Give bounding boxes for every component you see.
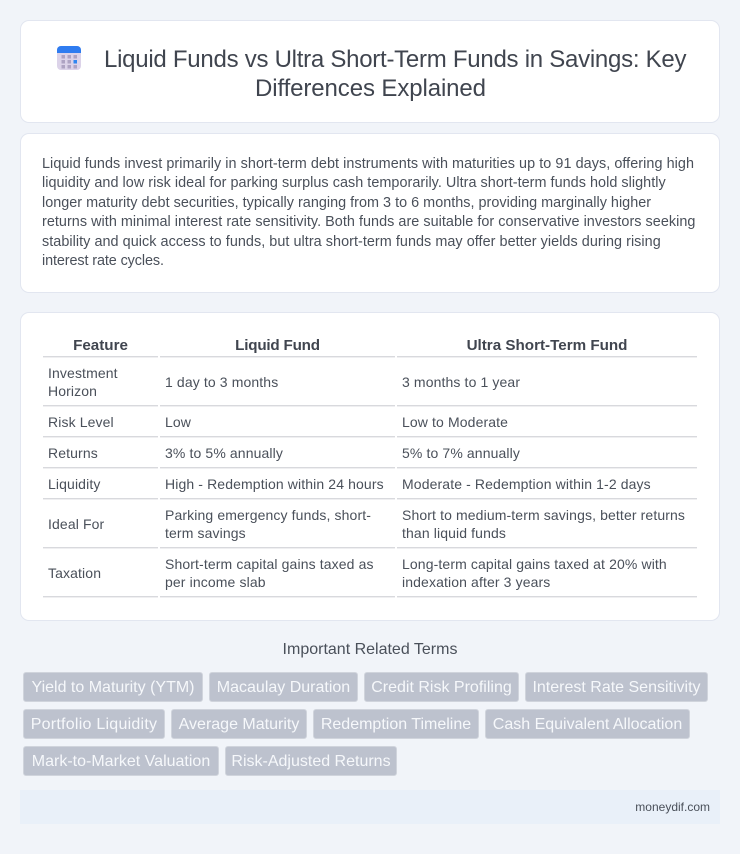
cell: ultra returns: 5% to 7% annually bbox=[402, 445, 520, 461]
cell: ultra ideal for bbox=[402, 507, 685, 541]
summary text: longer maturity debt securities, typically ranging from 3 to 6 months, providing marginally higher bbox=[42, 194, 651, 210]
tag: Yield to Maturity (YTM) bbox=[32, 679, 194, 696]
row: Risk Level: Risk Level bbox=[48, 414, 114, 430]
heading: important related terms: Important Related Terms bbox=[283, 641, 457, 658]
panel: comparison table card bbox=[20, 312, 720, 621]
row: Liquidity: Liquidity bbox=[48, 476, 100, 492]
cell: ultra horizon: 3 months to 1 year bbox=[402, 374, 520, 390]
tag: Interest Rate Sensitivity bbox=[532, 679, 701, 696]
summary text: Liquid funds invest primarily in short-term debt instruments with maturities up to 91 days, offering high bbox=[42, 156, 694, 172]
footer credit: moneydif.com bbox=[635, 800, 710, 814]
summary text bbox=[42, 156, 695, 269]
summary text: interest rate cycles. bbox=[42, 253, 164, 269]
cell: ultra taxation bbox=[402, 556, 667, 590]
tag: Portfolio Liquidity bbox=[31, 716, 157, 733]
tag bbox=[209, 672, 358, 702]
cell: ultra liquidity: Moderate - Redemption within 1-2 days bbox=[402, 476, 651, 492]
panel: title card bbox=[20, 20, 720, 123]
cell: ultra taxation: indexation after 3 years bbox=[402, 574, 550, 590]
tag bbox=[23, 709, 165, 739]
cell: ultra ideal for: Short to medium-term savings, better returns bbox=[402, 507, 685, 523]
tag bbox=[485, 709, 690, 739]
tag bbox=[23, 672, 203, 702]
row: Ideal For: Ideal For bbox=[48, 516, 104, 532]
row: Investment Horizon: Investment bbox=[48, 365, 118, 381]
title bbox=[104, 46, 686, 102]
title: Differences Explained bbox=[255, 75, 486, 102]
tag bbox=[225, 746, 397, 776]
icon: calendar bbox=[57, 46, 81, 70]
tag: Average Maturity bbox=[179, 716, 299, 733]
tag: Mark-to-Market Valuation bbox=[32, 753, 210, 770]
cell: ultra risk: Low to Moderate bbox=[402, 414, 508, 430]
tag bbox=[23, 746, 219, 776]
tag: Macaulay Duration bbox=[217, 679, 350, 696]
tag: Risk-Adjusted Returns bbox=[231, 753, 391, 770]
tag: Cash Equivalent Allocation bbox=[493, 716, 682, 733]
tag bbox=[171, 709, 307, 739]
cell: liquid ideal for: term savings bbox=[165, 525, 246, 541]
tag: Credit Risk Profiling bbox=[371, 679, 512, 696]
row: Taxation: Taxation bbox=[48, 565, 101, 581]
tag: Redemption Timeline bbox=[321, 716, 471, 733]
summary text: returns with minimal interest rate sensitivity. Both funds are suitable for conservative investors seeking bbox=[42, 214, 695, 230]
cell: liquid taxation: per income slab bbox=[165, 574, 266, 590]
cell: ultra taxation: Long-term capital gains taxed at 20% with bbox=[402, 556, 667, 572]
cell: liquid taxation bbox=[165, 556, 374, 590]
row: Investment Horizon: Horizon bbox=[48, 383, 97, 399]
cell: liquid returns: 3% to 5% annually bbox=[165, 445, 283, 461]
cell: ultra ideal for: than liquid funds bbox=[402, 525, 506, 541]
cell: liquid taxation: Short-term capital gains taxed as bbox=[165, 556, 374, 572]
row: Returns: Returns bbox=[48, 445, 98, 461]
summary text: stability and quick access to funds, but ultra short-term funds may offer better yields during rising bbox=[42, 234, 661, 250]
table header: Ultra Short-Term Fund: Ultra Short-Term Fund bbox=[467, 337, 627, 354]
cell: liquid risk: Low bbox=[165, 414, 191, 430]
table header: Liquid Fund: Liquid Fund bbox=[235, 337, 320, 354]
summary text: liquidity and low risk ideal for parking surplus cash temporarily. Ultra short-term funds hold slightly bbox=[42, 175, 666, 191]
tag bbox=[313, 709, 479, 739]
panel: summary card bbox=[20, 133, 720, 293]
cell: liquid horizon: 1 day to 3 months bbox=[165, 374, 278, 390]
cell: liquid ideal for bbox=[165, 507, 371, 541]
cell: liquid liquidity: High - Redemption within 24 hours bbox=[165, 476, 384, 492]
tag bbox=[525, 672, 708, 702]
footer bar bbox=[20, 790, 720, 824]
table header: Feature: Feature bbox=[73, 337, 128, 354]
row: Investment Horizon bbox=[48, 365, 118, 399]
title: Liquid Funds vs Ultra Short-Term Funds in Savings: Key bbox=[104, 46, 686, 73]
cell: liquid ideal for: Parking emergency funds, short- bbox=[165, 507, 371, 523]
tag bbox=[364, 672, 519, 702]
